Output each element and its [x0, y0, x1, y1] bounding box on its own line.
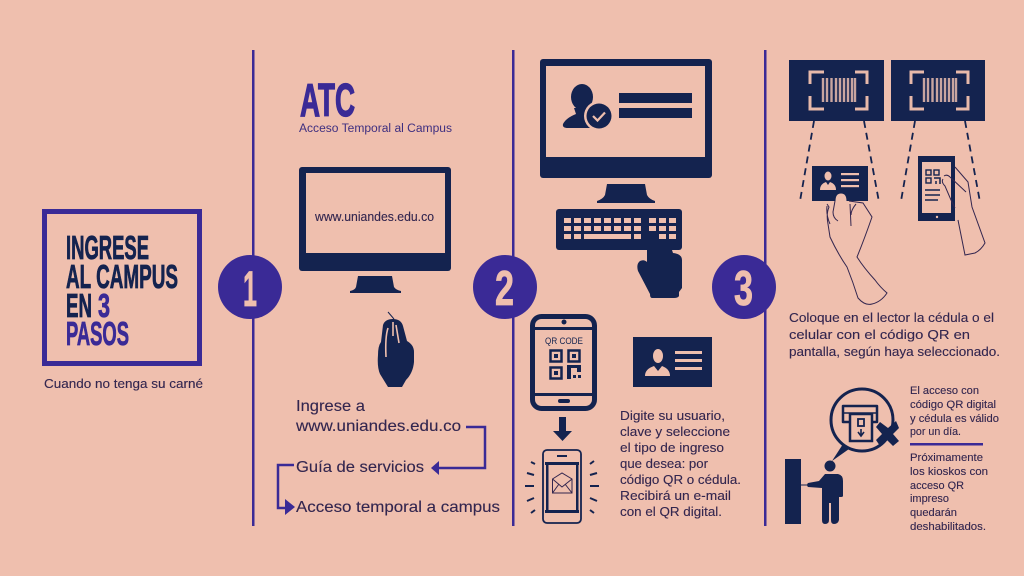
icon: monitor with user login: [540, 59, 712, 203]
instructions text: Coloque en el lector la cédula o el: [789, 310, 994, 325]
instructions text: Ingrese a: [296, 398, 365, 415]
panel: title: [44, 212, 203, 391]
note: access validity: El acceso con: [910, 385, 979, 397]
icon: hand holding ID card: [812, 166, 887, 304]
icon: hand on mouse: [378, 312, 414, 387]
instructions text: [295, 398, 500, 516]
badge: step 1: 1: [243, 261, 257, 317]
heading caption: Acceso Temporal al Campus: [299, 123, 452, 135]
instructions text: Recibirá un e-mail: [620, 488, 731, 503]
instructions text: Acceso temporal a campus: [296, 499, 500, 516]
badge: step 2: 2: [495, 262, 514, 316]
instructions text: que desea: por: [620, 456, 709, 471]
note: kiosks disabled soon: deshabilitados.: [910, 521, 986, 533]
icon: hand holding phone with QR code: [918, 156, 985, 255]
subtitle: Cuando no tenga su carné: [44, 376, 203, 391]
title: AL CAMPUS: [66, 258, 178, 295]
title: PASOS: [66, 315, 129, 352]
scan beams: [800, 121, 980, 202]
badge: step 2: [473, 255, 537, 319]
arrow: QR code sent to e-mail: [553, 417, 572, 441]
instructions text: pantalla, según haya seleccionado.: [789, 344, 1000, 359]
icon: keyboard: [556, 209, 682, 250]
panel: step 1: [278, 74, 500, 516]
icon: barcode reader left: [789, 60, 884, 121]
badge: step 3: 3: [734, 262, 753, 316]
note: kiosks disabled soon: Próximamente: [910, 452, 983, 464]
icon: phone with e-mail: [525, 450, 599, 523]
title: 3: [98, 287, 110, 324]
note: access validity: [910, 385, 999, 438]
panel: step 2: [525, 59, 741, 523]
note: access validity: y cédula es válido: [910, 413, 999, 425]
note: kiosks disabled soon: los kioskos con: [910, 466, 988, 478]
icon: hand on keyboard: [637, 250, 682, 298]
panel: step 3: [785, 60, 1000, 533]
badge: step 1: [218, 255, 282, 319]
arrow: web to services guide: [431, 427, 485, 475]
note: kiosks disabled soon: quedarán: [910, 507, 957, 519]
icon: phone with QR code: [532, 316, 595, 408]
icon: barcode reader right: [891, 60, 985, 121]
title: [66, 229, 178, 352]
instructions text: Guía de servicios: [296, 459, 424, 476]
instructions text: Digite su usuario,: [620, 408, 725, 423]
note: kiosks disabled soon: impreso: [910, 493, 949, 505]
instructions text: [620, 408, 741, 519]
title: EN: [66, 287, 92, 324]
note: kiosks disabled soon: [910, 452, 988, 533]
title frame: [44, 212, 200, 364]
icon: phone with QR code: QR CODE: [545, 336, 583, 346]
instructions text: con el QR digital.: [620, 504, 722, 519]
badge: step 3: [712, 255, 776, 319]
instructions text: código QR o cédula.: [620, 472, 741, 487]
instructions text: [789, 310, 1000, 359]
icon: monitor with web address: www.uniandes.edu.co: [314, 210, 434, 224]
step dividers: [252, 50, 766, 526]
icon: ID card: [633, 337, 712, 387]
note: access validity: código QR digital: [910, 399, 996, 411]
arrow: services guide to temporary access: [278, 465, 295, 515]
heading: ATC: ATC: [300, 74, 355, 126]
instructions text: el tipo de ingreso: [620, 440, 724, 455]
instructions text: www.uniandes.edu.co: [295, 418, 461, 435]
instructions text: celular con el código QR en: [789, 327, 970, 342]
note: kiosks disabled soon: acceso QR: [910, 480, 964, 492]
title: INGRESE: [66, 229, 149, 266]
note: access validity: por un día.: [910, 426, 961, 438]
icon: person at disabled kiosk: [785, 389, 899, 524]
instructions text: clave y seleccione: [620, 424, 730, 439]
icon: monitor with web address: [299, 167, 451, 293]
